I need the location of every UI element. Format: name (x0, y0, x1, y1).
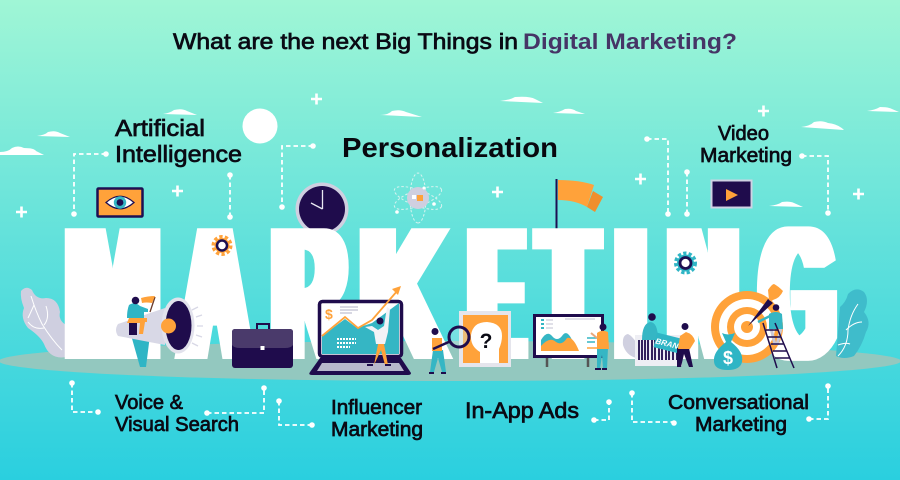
illustration: person on megaphone (116, 296, 203, 367)
heading: Artificial Intelligence: Artificial (115, 115, 205, 141)
illustration: money bag (714, 333, 742, 370)
ground ellipse (0, 341, 900, 381)
heading: Artificial Intelligence: Intelligence (115, 141, 242, 167)
white sun circle (242, 108, 278, 144)
big word MARKETING: M (68, 187, 158, 400)
big word MARKETING: G (763, 189, 833, 400)
illustration: portrait with question mark: ? (480, 330, 492, 353)
icon: atom (392, 173, 444, 223)
big word MARKETING: T (541, 188, 595, 400)
plus sparkles (16, 94, 864, 218)
big word MARKETING: A (182, 187, 248, 400)
heading: Influencer Marketing: Marketing (331, 419, 423, 441)
illustration: presentation board with person (534, 316, 609, 369)
heading: Video Marketing: Video (718, 123, 769, 145)
big word MARKETING: K (362, 188, 444, 400)
heading: Conversational Marketing (668, 392, 809, 436)
icon: teal gear (676, 254, 694, 272)
dashed connectors (69, 136, 831, 428)
illustration: briefcase (232, 324, 293, 368)
heading: Conversational Marketing: Conversational (668, 392, 809, 414)
heading: Voice & Visual Search (115, 392, 239, 436)
heading: Voice & Visual Search: Visual Search (115, 414, 239, 436)
big word MARKETING: I (618, 187, 643, 400)
clouds (0, 97, 899, 207)
icon: clock (296, 182, 348, 236)
icon: orange gear (214, 238, 230, 254)
big word MARKETING: N (671, 189, 735, 400)
plant: right leaf (836, 289, 869, 358)
illustration: money bag: $ (723, 348, 733, 368)
heading: Personalization: Personalization (342, 132, 558, 163)
heading: In-App Ads: In-App Ads (465, 398, 579, 423)
heading: Video Marketing (700, 123, 792, 167)
plant: left leaf (21, 288, 66, 357)
heading: Influencer Marketing (331, 397, 423, 441)
big word MARKETING: R (274, 188, 344, 399)
heading: Video Marketing: Marketing (700, 145, 792, 167)
big word MARKETING: E (472, 186, 521, 400)
big word MARKETING (68, 186, 833, 400)
illustration: target with dart and ladder (711, 284, 794, 368)
title: What are the next Big Things in (173, 29, 518, 54)
illustration: laptop with growth chart (309, 286, 411, 375)
heading: Conversational Marketing: Marketing (695, 414, 787, 436)
icon: eye screen (98, 188, 142, 216)
icon: orange flag (556, 179, 603, 229)
illustration: portrait with question mark (449, 311, 511, 367)
heading: Voice & Visual Search: Voice & (115, 392, 184, 414)
heading: Artificial Intelligence (115, 115, 242, 167)
title: Digital Marketing? (523, 29, 737, 54)
illustration: barcode and brand tag (623, 313, 695, 367)
illustration: barcode and brand tag: BRAND (655, 337, 685, 352)
title (173, 29, 737, 54)
heading: Influencer Marketing: Influencer (331, 397, 422, 419)
icon: video player (712, 180, 752, 208)
illustration: person with magnifier (429, 328, 451, 373)
illustration: laptop with growth chart: $ (325, 306, 333, 322)
